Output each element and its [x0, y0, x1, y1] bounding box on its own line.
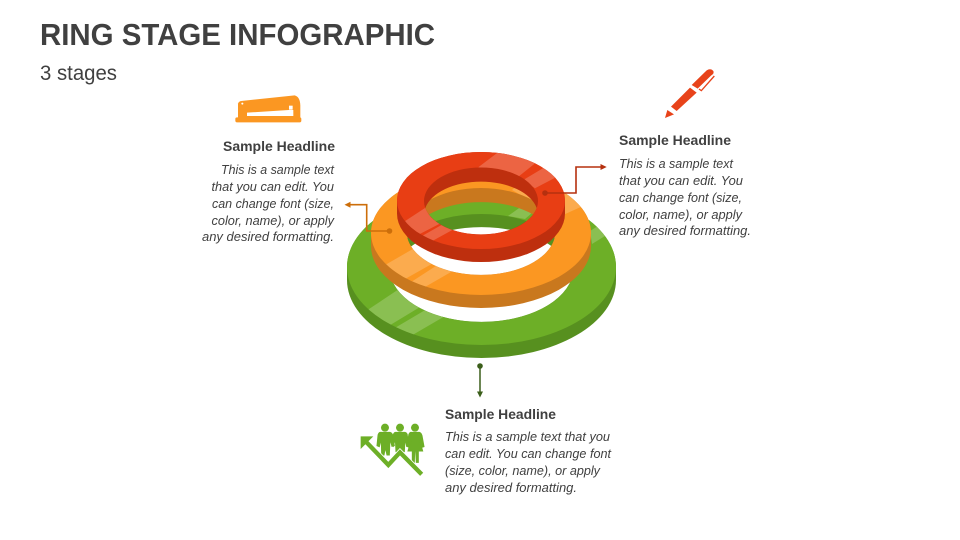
text block: right: that you can edit. You: [619, 174, 743, 188]
text block: left: that you can edit. You: [212, 180, 334, 194]
text block: left: Sample Headline: [223, 139, 336, 154]
connector: green to bottom text: [477, 363, 483, 398]
ring: orange middle stage: [371, 171, 591, 308]
text block: right: Sample Headline: [619, 133, 732, 148]
icon: people with rising arrow: [361, 424, 424, 474]
text block: bottom: This is a sample text that you: [445, 430, 610, 444]
text block: bottom: Sample Headline: [445, 407, 556, 422]
text block: left: color, name), or apply: [212, 214, 335, 228]
text block: left: any desired formatting.: [202, 230, 334, 244]
icon: pen: [665, 69, 714, 118]
text block: bottom: (size, color, name), or apply: [445, 464, 601, 478]
text block: left: This is a sample text: [221, 163, 335, 177]
text block: right: [619, 133, 751, 238]
text block: bottom: any desired formatting.: [445, 481, 577, 495]
subtitle: 3 stages: [40, 62, 117, 85]
ring: red top stage: [397, 147, 570, 262]
ring: green bottom stage: [347, 189, 618, 358]
title: RING STAGE INFOGRAPHIC: [40, 17, 435, 52]
text block: bottom: can edit. You can change font: [445, 447, 612, 461]
connector: orange to left text: [344, 202, 392, 234]
connector: red to right text: [542, 164, 607, 196]
text block: right: This is a sample text: [619, 157, 734, 171]
text block: right: color, name), or apply: [619, 208, 743, 222]
text block: bottom: [445, 407, 612, 495]
icon: stapler: [235, 95, 301, 122]
text block: right: any desired formatting.: [619, 224, 751, 238]
text block: right: can change font (size,: [619, 191, 742, 205]
text block: left: can change font (size,: [212, 197, 334, 211]
text block: left: [202, 139, 336, 244]
